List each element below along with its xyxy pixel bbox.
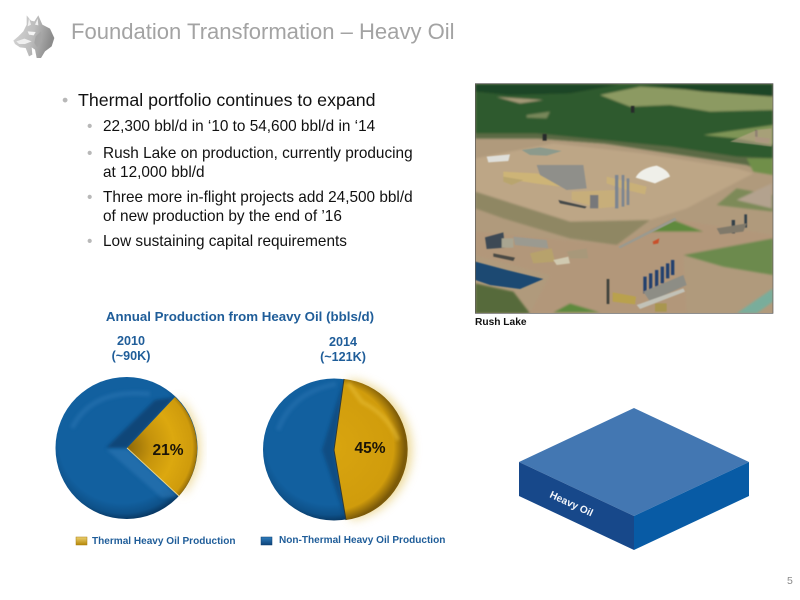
pie chart: 2010 — [56, 377, 200, 519]
logo: husky head — [14, 16, 54, 58]
label: 2014: 2014 — [329, 335, 357, 349]
bullet list: • — [87, 118, 92, 135]
bullet list: • — [87, 145, 92, 162]
bullet list — [62, 90, 413, 250]
sub bullet: Rush Lake: at 12,000 bbl/d — [103, 164, 205, 181]
sub bullet: projects — [87, 189, 413, 225]
sub bullet: Rush Lake: Rush Lake on production, currently producing — [103, 145, 413, 162]
legend label: thermal: Thermal Heavy Oil Production — [92, 536, 235, 547]
bullet list: • — [87, 233, 92, 250]
label: 2010: 2010 — [117, 334, 145, 348]
label: 2010: (~90K) — [112, 349, 150, 363]
slice: thermal 21% — [127, 397, 197, 496]
sub bullet: projects: Three more in-flight projects add 24,500 bbl/d — [103, 189, 413, 206]
sub bullet: capital: Low sustaining capital requirements — [103, 233, 347, 250]
bullet list: • — [62, 90, 68, 110]
label: 2014: (~121K) — [320, 350, 366, 364]
legend swatch: thermal — [76, 537, 87, 545]
pie chart: 2014 — [263, 378, 412, 520]
value: 21%: 21% — [152, 442, 184, 459]
label: 2010 — [112, 334, 150, 363]
sub bullet: projects: of new production by the end of ’16 — [103, 208, 342, 225]
legend label: non-thermal: Non-Thermal Heavy Oil Production — [279, 535, 445, 546]
block label: Heavy Oil — [548, 490, 595, 519]
title: Foundation Transformation – Heavy Oil — [71, 19, 455, 44]
sub bullet: Rush Lake — [87, 145, 413, 181]
main bullet: Thermal portfolio continues to expand — [78, 90, 376, 110]
sub bullet: growth: 22,300 bbl/d in ‘10 to 54,600 bbl/d in ‘14 — [103, 118, 375, 135]
label: 2014 — [320, 335, 366, 364]
chart title: Annual Production from Heavy Oil (bbls/d) — [106, 309, 374, 324]
slice: thermal 45% — [334, 379, 408, 520]
value: 45%: 45% — [354, 440, 386, 457]
photo caption: Rush Lake — [475, 317, 527, 328]
bullet list: • — [87, 189, 92, 206]
legend swatch: non-thermal — [261, 537, 272, 545]
page number: 5 — [787, 575, 793, 587]
photo: Rush Lake site — [475, 83, 774, 314]
